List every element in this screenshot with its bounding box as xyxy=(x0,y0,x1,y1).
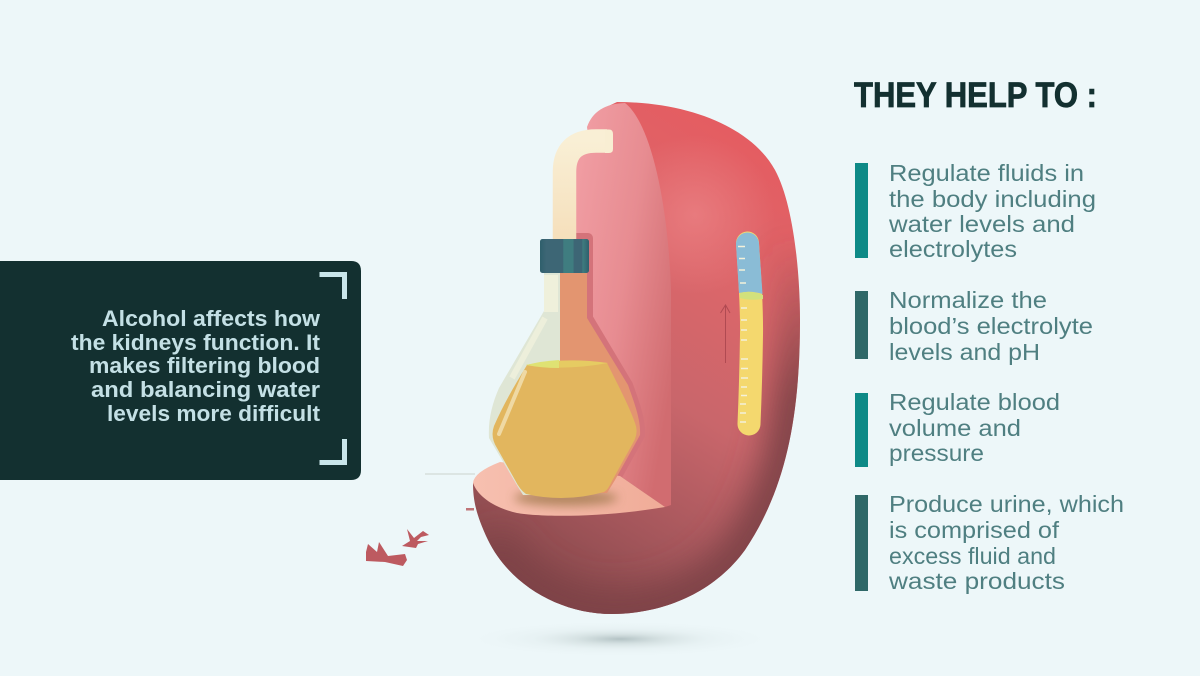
item text: excess fluid and xyxy=(889,543,1056,569)
item text: the body including xyxy=(889,186,1096,212)
callout text: the kidneys function. It xyxy=(71,330,321,355)
item text: waste products xyxy=(888,568,1065,594)
arrow xyxy=(720,305,730,363)
bar xyxy=(855,163,868,258)
item text: Regulate blood xyxy=(889,389,1060,415)
list item 1 xyxy=(855,160,1096,262)
bar xyxy=(855,291,868,359)
item text: volume and xyxy=(889,415,1021,441)
item text: water levels and xyxy=(888,211,1075,237)
flask halo on face xyxy=(576,233,638,477)
lower slab top xyxy=(473,462,665,516)
thermometer gauge xyxy=(736,232,763,424)
item text xyxy=(889,287,1093,365)
item text: Regulate fluids in xyxy=(889,160,1084,186)
gauge blue xyxy=(736,232,762,294)
gauge yellow xyxy=(748,243,752,424)
item text: electrolytes xyxy=(889,236,1017,262)
callout text xyxy=(71,306,321,426)
callout text: makes filtering blood xyxy=(89,353,320,378)
flask base shadow xyxy=(514,490,618,506)
tube xyxy=(564,141,607,240)
item text xyxy=(889,389,1060,466)
callout text: Alcohol affects how xyxy=(102,306,321,331)
bar xyxy=(855,495,868,591)
list item 3 xyxy=(855,389,1060,467)
glass highlight xyxy=(499,372,525,434)
faint line xyxy=(425,473,475,475)
panel: alcohol callout xyxy=(0,261,361,480)
flask xyxy=(489,270,640,498)
callout text: levels more difficult xyxy=(107,401,321,426)
item text: Normalize the xyxy=(889,287,1047,313)
bar xyxy=(855,393,868,467)
list item 4 xyxy=(855,491,1124,594)
icon: top right bracket xyxy=(320,274,344,299)
small red mark xyxy=(466,508,474,510)
callout text: and balancing water xyxy=(91,377,320,402)
icon: bottom right bracket xyxy=(320,439,344,462)
flask liquid xyxy=(493,361,637,498)
item text xyxy=(888,160,1096,262)
item text: Produce urine, which xyxy=(889,491,1124,517)
inner pink cut face xyxy=(575,103,671,507)
item text: levels and pH xyxy=(889,339,1040,365)
item text: pressure xyxy=(889,440,984,466)
shadow under kidney xyxy=(475,622,765,656)
item text: is comprised of xyxy=(889,517,1060,543)
item text: blood’s electrolyte xyxy=(889,313,1093,339)
liquid surface xyxy=(526,360,608,368)
flask cap xyxy=(540,239,589,273)
item text xyxy=(888,491,1124,594)
kidney illustration xyxy=(460,95,810,620)
list item 2 xyxy=(855,287,1093,365)
decorative small red figures xyxy=(366,529,429,566)
heading: THEY HELP TO : xyxy=(854,76,1097,115)
kidney body xyxy=(460,95,810,620)
